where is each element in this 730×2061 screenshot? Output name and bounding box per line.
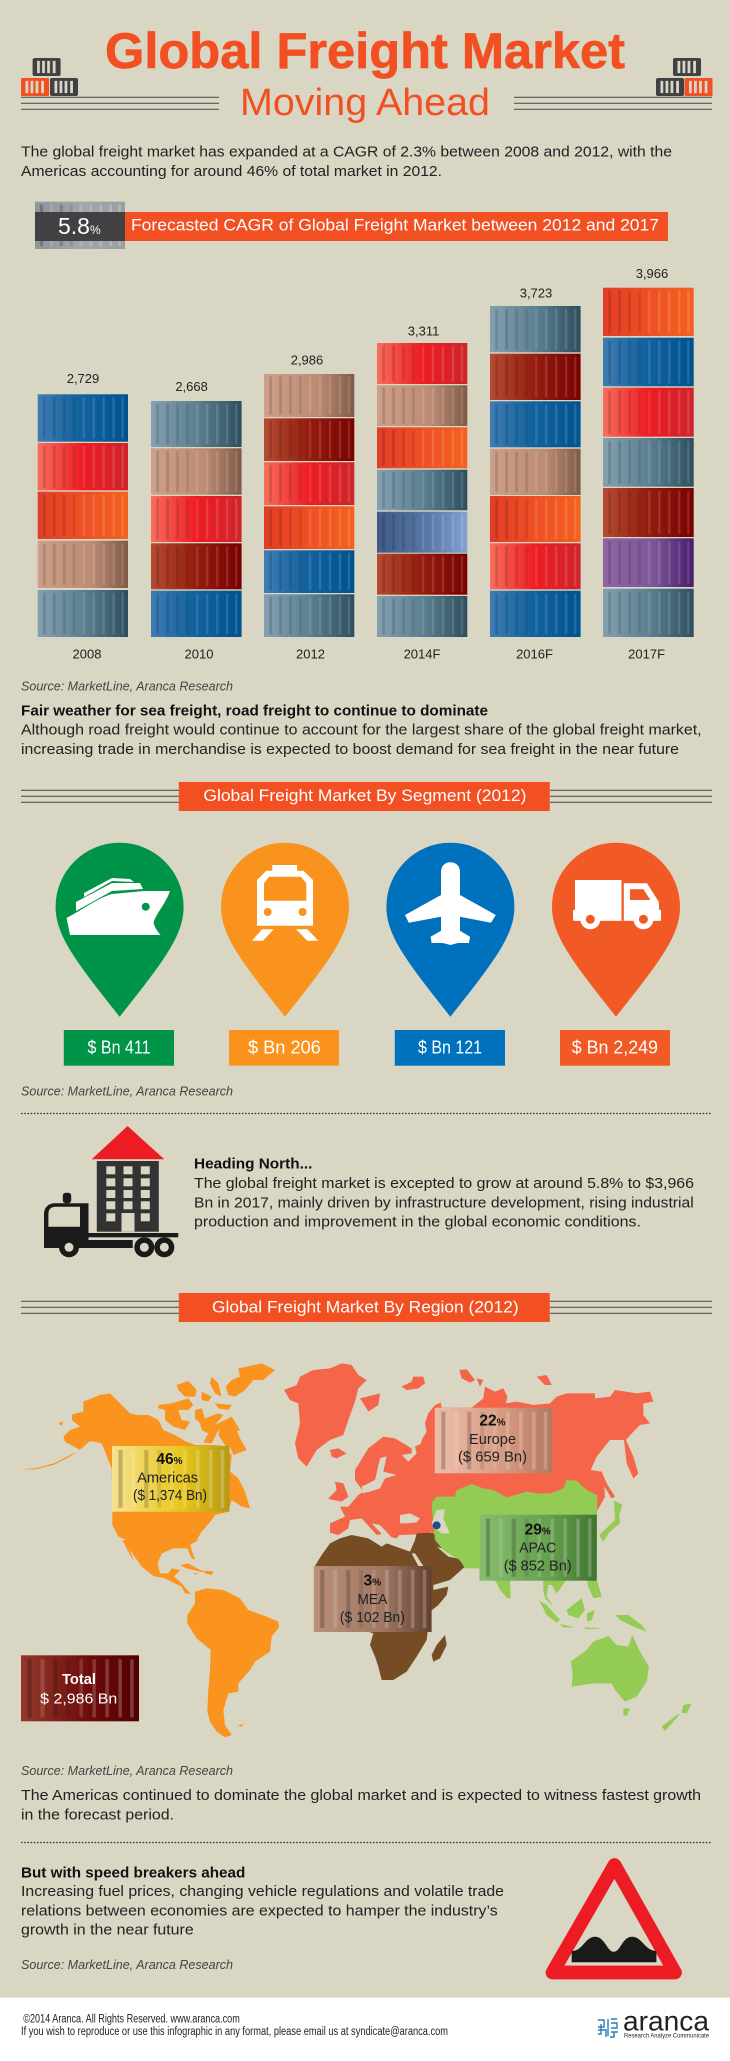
map callout: APAC	[480, 1515, 597, 1581]
year labels: 2012	[296, 646, 325, 661]
bar 2010	[151, 401, 242, 637]
text block: heading north: Bn in 2017, mainly driven by infrastructure development, rising industrial	[194, 1195, 694, 1211]
value box: rail: $ Bn 206	[248, 1037, 321, 1057]
map callout: Europe	[435, 1408, 553, 1473]
text block: heading north: The global freight market is excepted to grow at around 5.8% to $3,966	[194, 1176, 694, 1192]
heading: by segment	[179, 782, 550, 811]
bar values: 3,311	[408, 323, 439, 338]
dark value panel	[35, 212, 125, 241]
map callout: Americas: Americas	[137, 1469, 198, 1486]
bar 2008	[38, 394, 128, 637]
year labels: 2008	[73, 646, 101, 661]
value box: road	[560, 1030, 670, 1066]
year labels: 2017F	[628, 646, 665, 661]
intro text: Americas accounting for around 46% of total market in 2012.	[21, 163, 442, 180]
icon: truck carrying building	[44, 1126, 178, 1257]
map callout: Europe: Europe	[469, 1431, 516, 1448]
bar 2016F	[490, 306, 581, 637]
icon: speed breaker road sign	[552, 1865, 675, 1972]
footer text	[21, 2014, 448, 2038]
map callout: APAC: 29%	[525, 1521, 551, 1538]
banner label: Forecasted CAGR of Global Freight Market between 2012 and 2017	[131, 217, 659, 235]
text block: fair weather: Fair weather for sea freight, road freight to continue to dominate	[21, 703, 488, 719]
map callout: MEA	[314, 1566, 432, 1632]
text block: Americas dominate: The Americas continued to dominate the global market and is expected to witness fastest growth	[21, 1788, 701, 1804]
icon: ship	[67, 878, 170, 935]
source note: Source: MarketLine, Aranca Research	[21, 1958, 233, 1972]
text block: speed breakers: But with speed breakers ahead	[21, 1865, 245, 1881]
subtitle: Moving Ahead	[240, 82, 490, 124]
value box: air: $ Bn 121	[418, 1037, 482, 1057]
year labels: 2014F	[404, 646, 440, 661]
icon: stacked containers right	[656, 58, 712, 96]
icon: plane	[405, 862, 496, 945]
source note: Source: MarketLine, Aranca Research	[21, 1085, 233, 1099]
map callout: MEA: 3%	[364, 1573, 381, 1590]
icon: truck	[573, 880, 661, 929]
map callout: Europe: 22%	[479, 1413, 506, 1430]
pin: road freight	[552, 843, 680, 1017]
gray container behind CAGR value	[35, 202, 125, 249]
value box: sea	[64, 1030, 174, 1066]
text block: speed breakers: Increasing fuel prices, changing vehicle regulations and volatile trade	[21, 1884, 504, 1900]
pin: air freight	[386, 843, 514, 1017]
map callout: Total	[21, 1655, 139, 1721]
map: Europe and Russia	[284, 1363, 653, 1538]
map callout: Europe: ($ 659 Bn)	[458, 1448, 527, 1465]
bar 2012	[264, 374, 354, 637]
footer band	[0, 1998, 730, 2061]
text block: fair weather: increasing trade in merchandise is expected to boost demand for sea freight in the near future	[21, 742, 679, 758]
bar values: 2,729	[67, 371, 99, 386]
year labels: 2010	[185, 646, 213, 661]
footer text: ©2014 Aranca. All Rights Reserved. www.aranca.com	[23, 2014, 240, 2026]
map callout: Total: Total	[62, 1671, 96, 1688]
source note: Source: MarketLine, Aranca Research	[21, 680, 233, 694]
bar values: 2,986	[291, 353, 323, 368]
heading: by region: Global Freight Market By Region (2012)	[212, 1299, 519, 1317]
map callout: APAC: APAC	[519, 1540, 556, 1557]
map callout: Total: $ 2,986 Bn	[40, 1690, 117, 1707]
source note: Source: MarketLine, Aranca Research	[21, 1764, 233, 1778]
bar values: 3,966	[636, 266, 668, 281]
bar values: 2,668	[175, 379, 208, 394]
year labels	[73, 646, 665, 661]
text block: fair weather	[21, 703, 702, 758]
map: Americas	[20, 1363, 279, 1737]
value box: air	[395, 1030, 505, 1066]
bar 2014F	[377, 343, 467, 637]
intro text: The global freight market has expanded at a CAGR of 2.3% between 2008 and 2012, with the	[21, 144, 672, 161]
bar values	[67, 266, 668, 394]
map callout: Americas: ($ 1,374 Bn)	[133, 1487, 207, 1504]
orange banner bar	[125, 212, 668, 241]
intro text	[21, 144, 672, 180]
pin: sea freight	[56, 843, 184, 1017]
pin: rail freight	[221, 843, 349, 1017]
value box: road: $ Bn 2,249	[572, 1037, 658, 1057]
title: Global Freight Market	[105, 22, 625, 79]
map: Middle East and Africa	[314, 1533, 465, 1680]
text block: Americas dominate	[21, 1788, 701, 1823]
text block: heading north: production and improvement in the global economic conditions.	[194, 1215, 641, 1231]
text block: speed breakers: relations between economies are expected to hamper the industry’s	[21, 1903, 498, 1919]
text block: Americas dominate: in the forecast period.	[21, 1807, 174, 1823]
map callout: Americas	[112, 1446, 230, 1512]
icon: train	[252, 865, 318, 941]
text block: speed breakers	[21, 1865, 504, 1939]
text block: heading north	[194, 1157, 694, 1231]
heading: by segment: Global Freight Market By Segment (2012)	[203, 787, 526, 805]
icon: stacked containers left	[21, 58, 78, 96]
map callout: APAC: ($ 852 Bn)	[504, 1558, 572, 1575]
bar 2017F	[603, 288, 694, 637]
map: Asia Pacific	[432, 1480, 692, 1731]
map callout: Americas: 46%	[156, 1451, 183, 1468]
bar values: 3,723	[520, 286, 552, 301]
text block: heading north: Heading North...	[194, 1157, 312, 1173]
value box: rail	[229, 1030, 339, 1066]
map callout: MEA: ($ 102 Bn)	[340, 1609, 405, 1626]
footer text: If you wish to reproduce or use this infographic in any format, please email us at syndicate@aranca.com	[21, 2026, 448, 2038]
logo: aranca: Research Analyze Communicate	[624, 2032, 709, 2040]
bar chart: container stacks	[38, 266, 694, 661]
CAGR value: 5.8%	[58, 213, 101, 239]
heading: by region	[179, 1293, 550, 1322]
logo: aranca: aranca	[623, 2006, 709, 2037]
world map	[20, 1363, 692, 1737]
year labels: 2016F	[516, 646, 553, 661]
value box: sea: $ Bn 411	[88, 1037, 150, 1057]
map callout: MEA: MEA	[357, 1591, 387, 1608]
text block: speed breakers: growth in the near future	[21, 1923, 194, 1939]
CAGR banner	[35, 202, 668, 249]
text block: fair weather: Although road freight would continue to account for the largest share of the global freight market,	[21, 723, 702, 739]
